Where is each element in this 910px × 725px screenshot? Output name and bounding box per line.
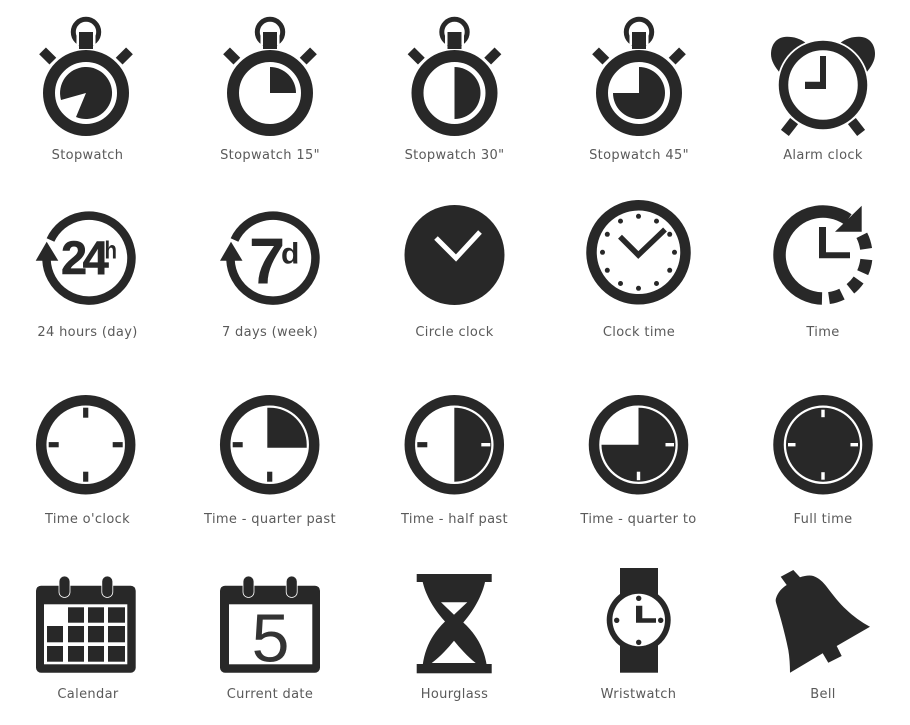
label: Time o'clock: Time o'clock [44,512,130,527]
icon: calendar [36,576,136,673]
icon: 7 days [220,216,315,301]
icon: wristwatch [607,568,671,673]
icon: time [780,206,866,298]
icon: stopwatch 45 [592,19,686,130]
icon: 24 hours [36,216,131,301]
label: Current date: Current date [227,687,313,702]
icon: time half past [410,400,499,489]
icon: time quarter to [594,400,683,489]
label: Wristwatch: Wristwatch [601,687,676,702]
label: 24 hours (day): 24 hours (day) [37,325,138,340]
label: Time: Time [805,325,840,340]
icon: bell [776,570,870,673]
icon: 24 hours: 24 [61,231,109,284]
icon: hourglass [417,574,492,673]
label: Clock time: Clock time [603,325,675,340]
icon: current date: 5 [252,601,289,677]
label: Stopwatch: Stopwatch [52,148,123,163]
icon: full time [778,400,868,489]
label: Time - half past: Time - half past [400,512,508,527]
label: Stopwatch 30: Stopwatch 30" [405,148,504,163]
label: 7 days (week): 7 days (week) [222,325,318,340]
icon: clock time [592,205,686,299]
label: Alarm clock: Alarm clock [783,148,863,163]
label: Bell: Bell [810,687,836,702]
icon: 24 hours: h [104,236,117,264]
label: Hourglass: Hourglass [421,687,488,702]
icon: stopwatch 30 [408,19,501,130]
label: Time - quarter past: Time - quarter past [203,512,336,527]
label: Circle clock: Circle clock [415,325,494,340]
label: Stopwatch 45: Stopwatch 45" [589,148,689,163]
label: Stopwatch 15: Stopwatch 15" [220,148,320,163]
icon: 7 days: 7 [249,224,285,297]
icon: circle clock [404,205,504,305]
icon: time quarter past [225,400,314,489]
icon: 7 days: d [281,237,299,270]
label: Time - quarter to: Time - quarter to [579,512,697,527]
icon: stopwatch 15 [223,19,317,130]
icon: alarm clock [771,37,875,136]
label: Calendar: Calendar [57,687,119,702]
icon: time o'clock [41,400,130,489]
icon: stopwatch [39,19,133,130]
label: Full time: Full time [794,512,852,527]
icon: current date [220,576,320,677]
